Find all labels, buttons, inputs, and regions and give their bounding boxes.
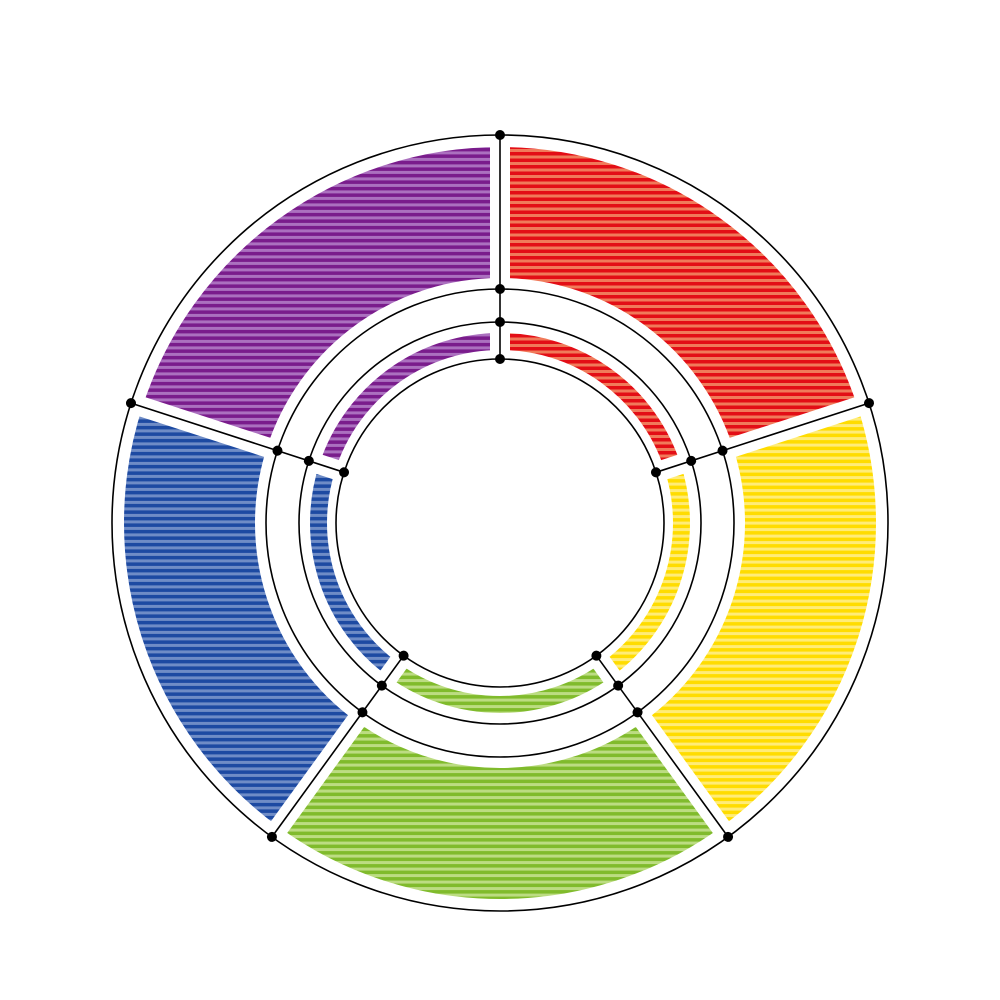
divider lines with dots — [126, 131, 874, 843]
ring outlines — [112, 135, 888, 911]
segment: red — [190, 212, 810, 834]
segment: yellow — [109, 132, 891, 914]
segment: blue — [66, 89, 934, 957]
segment: green — [66, 89, 934, 957]
chart: five-segment ring diagram — [66, 89, 934, 957]
segment: purple — [109, 132, 891, 914]
